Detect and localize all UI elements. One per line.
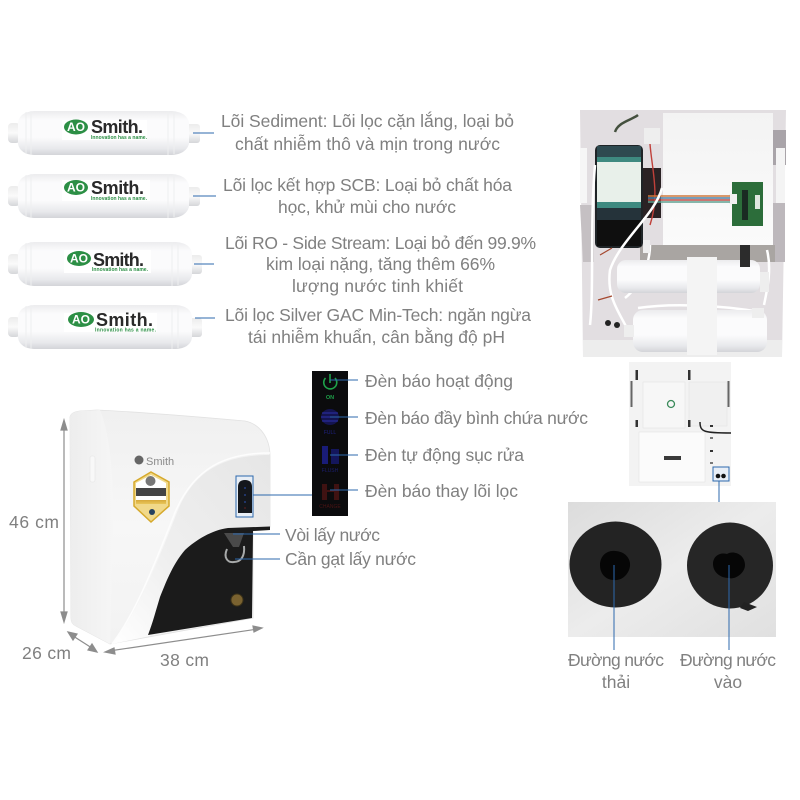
strap bbox=[687, 257, 717, 355]
label: auto flush indicator: Đèn tự động sục rửa bbox=[365, 445, 524, 465]
brass valve bbox=[231, 594, 243, 606]
text: RO filter bbox=[225, 233, 536, 296]
icon: power: ON bbox=[326, 395, 334, 401]
side grip bbox=[90, 456, 95, 482]
brand logo bbox=[134, 456, 174, 468]
filter cartridge: RO Side Stream bbox=[8, 242, 202, 286]
filter cartridge: Silver GAC: Innovation has a name. bbox=[95, 328, 157, 334]
filter cartridge: Silver GAC bbox=[8, 305, 202, 349]
text: Silver GAC filter bbox=[225, 305, 531, 347]
text: RO filter: Lõi RO - Side Stream: Loại bỏ đến 99.9% bbox=[225, 233, 536, 253]
filter cartridge: SCB: Smith. bbox=[91, 178, 144, 198]
swoosh band bbox=[112, 455, 270, 644]
filter cartridge: RO Side Stream: Smith. bbox=[93, 250, 144, 270]
text: SCB filter bbox=[223, 175, 512, 217]
black lower panel bbox=[148, 526, 270, 635]
white tank bbox=[663, 113, 773, 245]
text: SCB filter: học, khử mùi cho nước bbox=[278, 197, 456, 217]
text: Sediment filter: chất nhiễm thô và mịn trong nước bbox=[235, 133, 500, 154]
leader lines: water ports bbox=[614, 565, 729, 650]
label: lever: Cần gạt lấy nước bbox=[285, 549, 416, 569]
icon: tank full bbox=[321, 409, 339, 436]
lower filter cylinder bbox=[633, 310, 767, 352]
label: inlet water line: vào bbox=[714, 672, 742, 692]
display window bbox=[236, 476, 253, 517]
text: Silver GAC filter: Lõi lọc Silver GAC Min-Tech: ngăn ngừa bbox=[225, 305, 531, 325]
icon: change filter: CHANGE bbox=[319, 504, 341, 510]
dimension arrow: depth bbox=[68, 632, 97, 652]
pump bbox=[595, 145, 643, 248]
filter cartridge: Sediment bbox=[8, 111, 200, 155]
circuit board bbox=[729, 182, 763, 226]
filter cartridge: Sediment: Smith. bbox=[91, 117, 143, 137]
filter cartridge: SCB bbox=[8, 174, 200, 218]
label: inlet water line: Đường nước bbox=[680, 650, 776, 670]
label: power indicator: Đèn báo hoạt động bbox=[365, 371, 513, 391]
port: inlet water bbox=[687, 522, 773, 611]
filter cartridge: SCB: Innovation has a name. bbox=[91, 196, 148, 202]
photo: rear panel bbox=[629, 362, 731, 486]
dimension arrow: width bbox=[105, 626, 262, 654]
filter cartridge: RO Side Stream: Innovation has a name. bbox=[92, 267, 149, 273]
filter cartridge: Sediment: Innovation has a name. bbox=[91, 135, 148, 141]
label: inlet water line bbox=[680, 650, 776, 692]
text: RO filter: kim loại nặng, tăng thêm 66% bbox=[266, 254, 495, 274]
filter cartridge: SCB: AO bbox=[67, 181, 85, 195]
body bbox=[70, 410, 270, 644]
wires above pump bbox=[615, 115, 661, 225]
label: height: 46 cm bbox=[9, 512, 59, 532]
side panel shading bbox=[70, 410, 113, 644]
label: waste water line: Đường nước bbox=[568, 650, 664, 670]
icon: tank full: FULL bbox=[324, 430, 336, 436]
text: Sediment filter: Lõi Sediment: Lõi lọc cặn lắng, loại bỏ bbox=[221, 110, 514, 131]
upper filter cylinder bbox=[617, 260, 760, 293]
connector line: rear panel to close-up bbox=[718, 481, 720, 502]
filter cartridge: Silver GAC: AO bbox=[72, 313, 90, 327]
label: tap: Vòi lấy nước bbox=[285, 525, 380, 545]
icon: change filter bbox=[319, 484, 341, 510]
filter cartridge: Sediment: AO bbox=[67, 120, 85, 134]
dimension arrow: height bbox=[61, 420, 67, 622]
text: SCB filter: Lõi lọc kết hợp SCB: Loại bỏ chất hóa bbox=[223, 175, 512, 195]
label: width: 38 cm bbox=[160, 650, 209, 670]
filter cartridge: RO Side Stream: AO bbox=[70, 252, 88, 266]
label: full tank indicator: Đèn báo đầy bình chứa nước bbox=[365, 408, 588, 428]
brand logo: Smith bbox=[146, 456, 174, 468]
label: waste water line: thải bbox=[602, 672, 630, 692]
control panel close-up bbox=[312, 371, 348, 516]
label: depth: 26 cm bbox=[22, 643, 71, 663]
tap bbox=[224, 533, 244, 562]
text: RO filter: lượng nước tinh khiết bbox=[292, 276, 463, 296]
text: Silver GAC filter: tái nhiễm khuẩn, cân bằng độ pH bbox=[248, 326, 505, 347]
leader lines: control panel and tap bbox=[233, 380, 358, 559]
leader lines: filters bbox=[193, 133, 216, 318]
icon: auto flush bbox=[322, 446, 339, 474]
ribbon cable bbox=[648, 196, 730, 202]
wiring and tubes bbox=[590, 165, 769, 335]
photo: water port close-up bbox=[568, 502, 776, 637]
badge bbox=[134, 472, 169, 522]
product: water purifier bbox=[70, 410, 270, 644]
port: waste water bbox=[570, 522, 662, 608]
filter cartridge: Silver GAC: Smith. bbox=[96, 310, 153, 330]
label: change filter indicator: Đèn báo thay lõi lọc bbox=[365, 481, 518, 501]
tube connectors bbox=[605, 240, 769, 337]
text: Sediment filter bbox=[221, 110, 514, 154]
label: waste water line bbox=[568, 650, 664, 692]
icon: power bbox=[324, 374, 337, 401]
photo: open interior of purifier bbox=[580, 110, 786, 357]
icon: auto flush: FLUSH bbox=[322, 468, 339, 474]
